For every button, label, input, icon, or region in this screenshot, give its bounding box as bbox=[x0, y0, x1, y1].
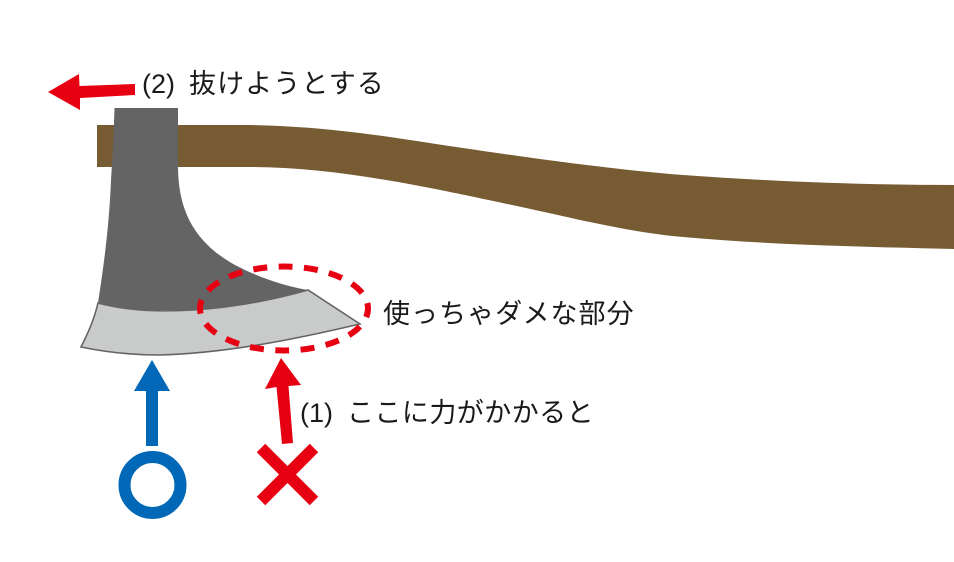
axe head bbox=[81, 108, 360, 355]
red arrow: wrong spot bbox=[265, 358, 301, 444]
axe handle bbox=[97, 125, 954, 249]
blue circle: correct mark bbox=[124, 457, 180, 513]
arrow: pulling out to the left bbox=[48, 74, 135, 110]
label: (1) force applied here: (1) bbox=[300, 398, 333, 428]
blue arrow: correct spot bbox=[134, 360, 170, 446]
label: (1) force applied here: ここに力がかかると bbox=[347, 398, 594, 428]
label: (2) pulling out: 抜けようとする bbox=[189, 69, 385, 99]
red cross: wrong mark bbox=[261, 448, 314, 501]
label: (2) pulling out: (2) bbox=[142, 69, 175, 99]
head: dark steel bbox=[98, 108, 320, 310]
label: forbidden part: 使っちゃダメな部分 bbox=[383, 299, 635, 329]
dashed ellipse: forbidden part bbox=[200, 266, 368, 350]
blade: light cutting edge bbox=[81, 290, 360, 355]
